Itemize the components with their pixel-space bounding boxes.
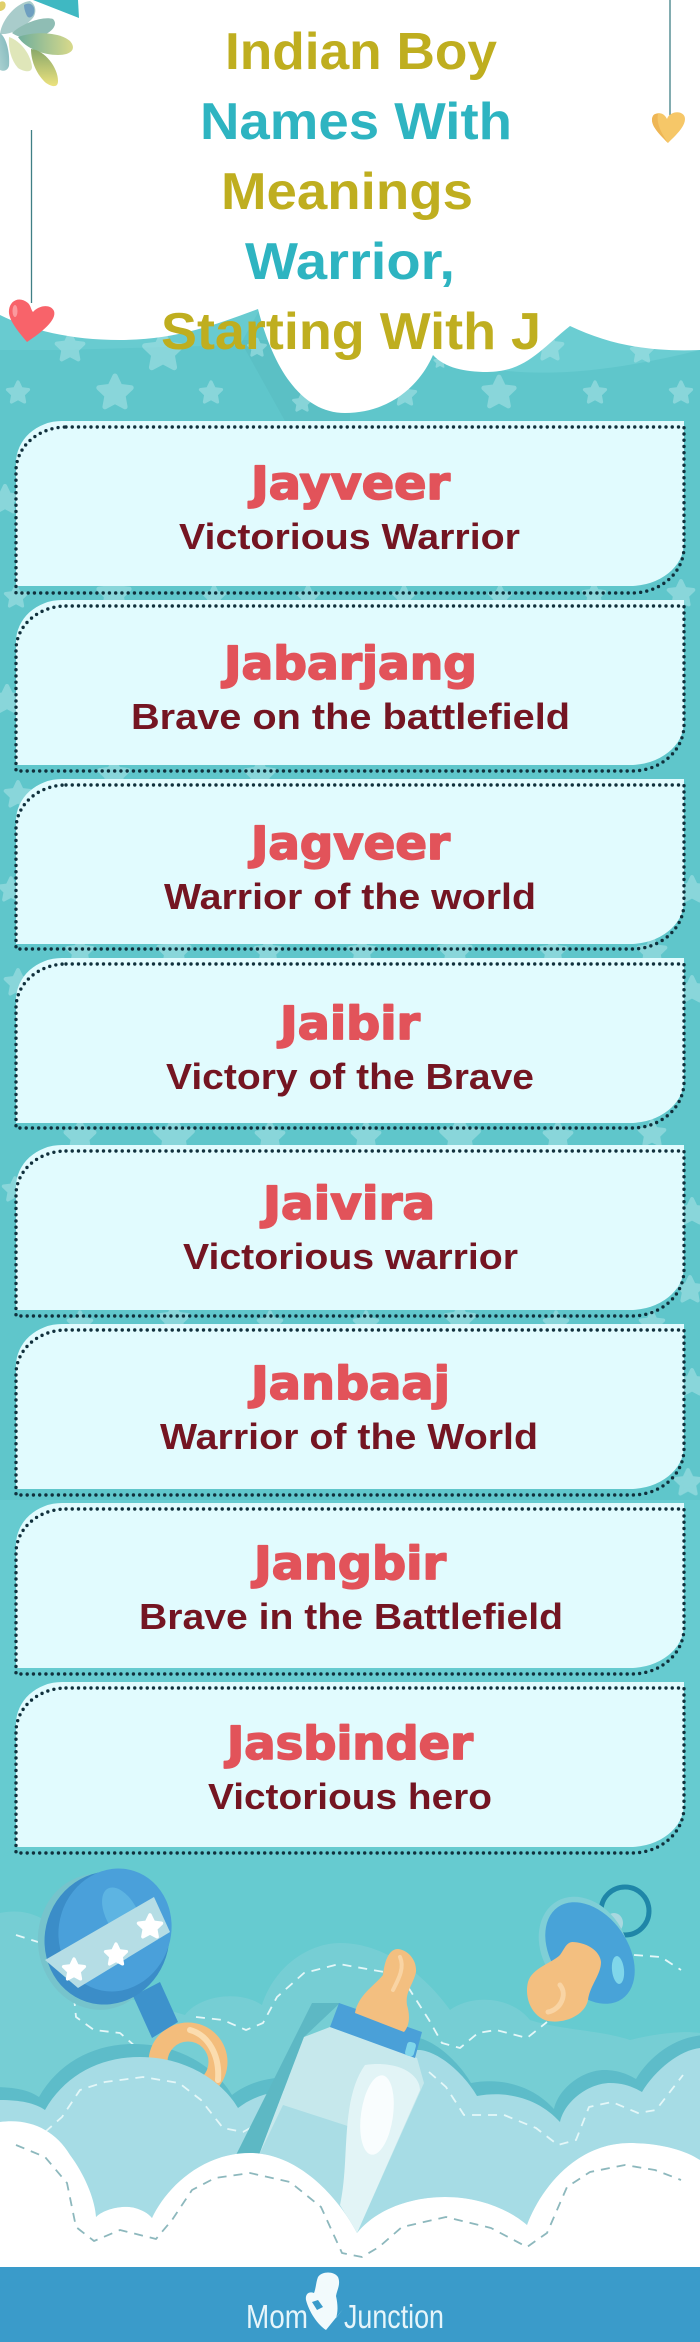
icon: rattle	[27, 1854, 218, 2092]
icon: watercolor leaves	[0, 1, 73, 86]
panel: Jasbinder: Jasbinder	[224, 1717, 474, 1770]
icon: baby bottle	[236, 1949, 424, 2233]
logo: MomJunction	[246, 2272, 444, 2335]
title: Warrior,	[245, 233, 455, 291]
panel: Jaibir	[16, 958, 684, 1128]
title	[161, 23, 541, 361]
logo: MomJunction: Mom	[246, 2298, 308, 2335]
middle cloud layer	[0, 2048, 700, 2342]
panel: Jangbir	[16, 1503, 684, 1674]
lower background tint	[0, 1500, 700, 2342]
back cloud layer	[0, 1912, 700, 2342]
panel: Jangbir: Brave in the Battlefield	[139, 1596, 563, 1637]
dashed stitching: front cloud	[16, 2145, 681, 2257]
title: Starting With J	[161, 303, 541, 361]
background shading	[0, 300, 700, 421]
panel: Janbaaj: Janbaaj	[248, 1357, 450, 1410]
panel: Jaibir: Jaibir	[277, 997, 421, 1050]
panel: Janbaaj: Warrior of the World	[160, 1416, 538, 1457]
panel: Jabarjang: Brave on the battlefield	[131, 696, 570, 737]
white top cloud	[0, 0, 700, 413]
panel: Jagveer: Warrior of the world	[164, 876, 536, 917]
icon: right hanging heart	[652, 0, 685, 143]
dashed stitching: upper	[16, 1935, 681, 2048]
white front cloud	[0, 2121, 700, 2270]
title: Names With	[200, 93, 512, 151]
panel: Jaibir: Victory of the Brave	[166, 1056, 534, 1097]
icon: pacifier	[521, 1880, 653, 2022]
panel: Jabarjang: Jabarjang	[221, 637, 477, 690]
panel: Janbaaj	[16, 1324, 684, 1495]
panel: Jayveer	[16, 421, 684, 593]
panel: Jaivira: Jaivira	[260, 1177, 435, 1230]
logo: MomJunction: Junction	[344, 2298, 444, 2335]
star pattern	[0, 333, 700, 1494]
bunting corner	[33, 0, 79, 18]
panel: Jayveer: Victorious Warrior	[179, 516, 520, 557]
icon: left hanging heart	[9, 130, 54, 342]
panel: Jangbir: Jangbir	[251, 1537, 447, 1590]
panel: Jagveer	[16, 779, 684, 949]
panel: Jagveer: Jagveer	[248, 817, 451, 870]
panel: Jasbinder	[16, 1682, 684, 1853]
panel: Jaivira: Victorious warrior	[183, 1236, 518, 1277]
panel: Jasbinder: Victorious hero	[208, 1776, 492, 1817]
footer bar	[0, 2267, 700, 2342]
cloud band	[0, 2035, 700, 2329]
front cloud band	[96, 2143, 700, 2256]
dashed stitching: middle	[45, 2072, 683, 2145]
title: Indian Boy	[225, 23, 497, 81]
panel: Jayveer: Jayveer	[248, 457, 451, 510]
panel: Jaivira	[16, 1145, 684, 1316]
title: Meanings	[221, 163, 473, 221]
panel: Jabarjang	[16, 600, 684, 771]
